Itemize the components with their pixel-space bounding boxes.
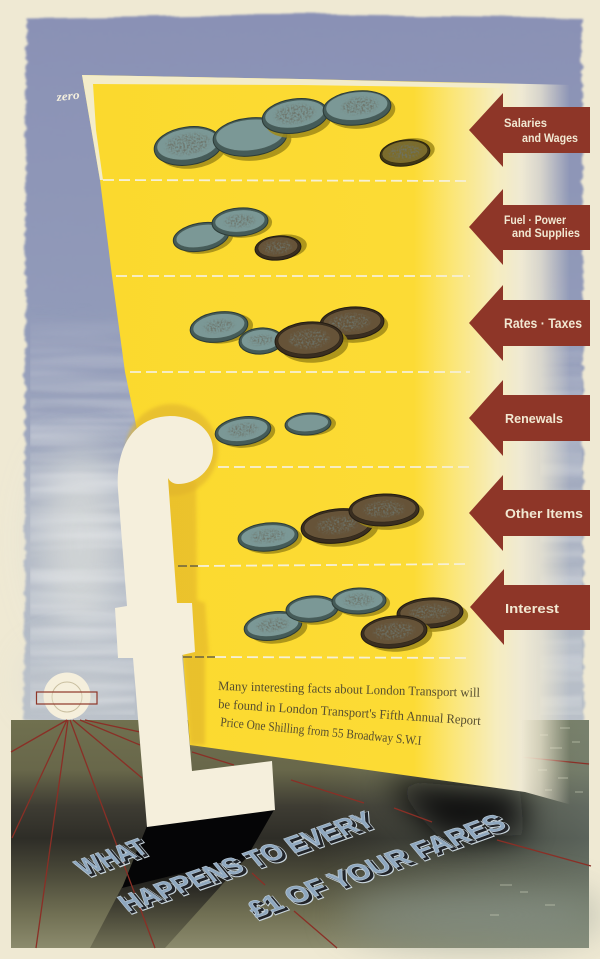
coins row 6: interest	[242, 587, 469, 655]
arrow: rates and taxes: Rates · Taxes	[504, 316, 582, 331]
coins row 1: salaries and wages	[152, 87, 436, 174]
ground with railway lines	[11, 720, 600, 948]
arrow: fuel power and supplies: Fuel · Power	[504, 213, 566, 227]
arrow: other items	[469, 475, 590, 551]
report note: be found in London Transport's Fifth Annual Report	[218, 696, 482, 728]
title: what happens to every £1 of your fares: £1 OF YOUR FARES	[245, 812, 516, 925]
pound sign	[115, 416, 275, 827]
arrow: renewals: Renewals	[505, 411, 563, 426]
coins row 4: renewals	[213, 411, 337, 452]
arrow: salaries and wages	[469, 93, 590, 167]
painted blue sky	[24, 14, 584, 722]
title: what happens to every £1 of your fares: WHAT	[73, 837, 157, 883]
report note	[218, 678, 482, 748]
report note: Many interesting facts about London Transport will	[218, 678, 481, 700]
arrow: fuel power and supplies: and Supplies	[512, 226, 580, 240]
title: what happens to every £1 of your fares: HAPPENS TO EVERY	[113, 807, 380, 917]
arrow: rates and taxes	[469, 285, 590, 361]
arrow: renewals	[469, 380, 590, 456]
yellow paper sheet	[82, 75, 590, 810]
coins row 5: other items	[237, 493, 425, 557]
railway lines	[11, 720, 591, 948]
arrow: interest	[470, 569, 590, 645]
title: what happens to every £1 of your fares: HAPPENS TO EVERY	[116, 809, 383, 918]
dashed dividers	[103, 180, 470, 658]
signature: zero	[55, 88, 80, 104]
title: what happens to every £1 of your fares: WHAT	[69, 835, 154, 881]
title: what happens to every £1 of your fares: HAPPENS TO EVERY	[116, 809, 384, 919]
title: what happens to every £1 of your fares: £1 OF YOUR FARES	[245, 811, 515, 924]
arrow: other items: Other Items	[505, 506, 583, 521]
title: what happens to every £1 of your fares: WHAT	[73, 836, 157, 882]
arrow: salaries and wages: and Wages	[522, 131, 578, 145]
arrow: salaries and wages: Salaries	[504, 116, 547, 130]
title: what happens to every £1 of your fares	[69, 807, 516, 925]
arrow: interest: Interest	[505, 601, 560, 616]
water speckle	[490, 728, 583, 915]
coins row 3: rates and taxes	[188, 305, 389, 365]
report note: Price One Shilling from 55 Broadway S.W.I	[220, 714, 422, 748]
coins row 2: fuel power and supplies	[171, 206, 308, 262]
title: what happens to every £1 of your fares: £1 OF YOUR FARES	[241, 810, 512, 923]
underground roundel	[36, 672, 97, 720]
arrow: fuel power and supplies	[469, 189, 590, 265]
